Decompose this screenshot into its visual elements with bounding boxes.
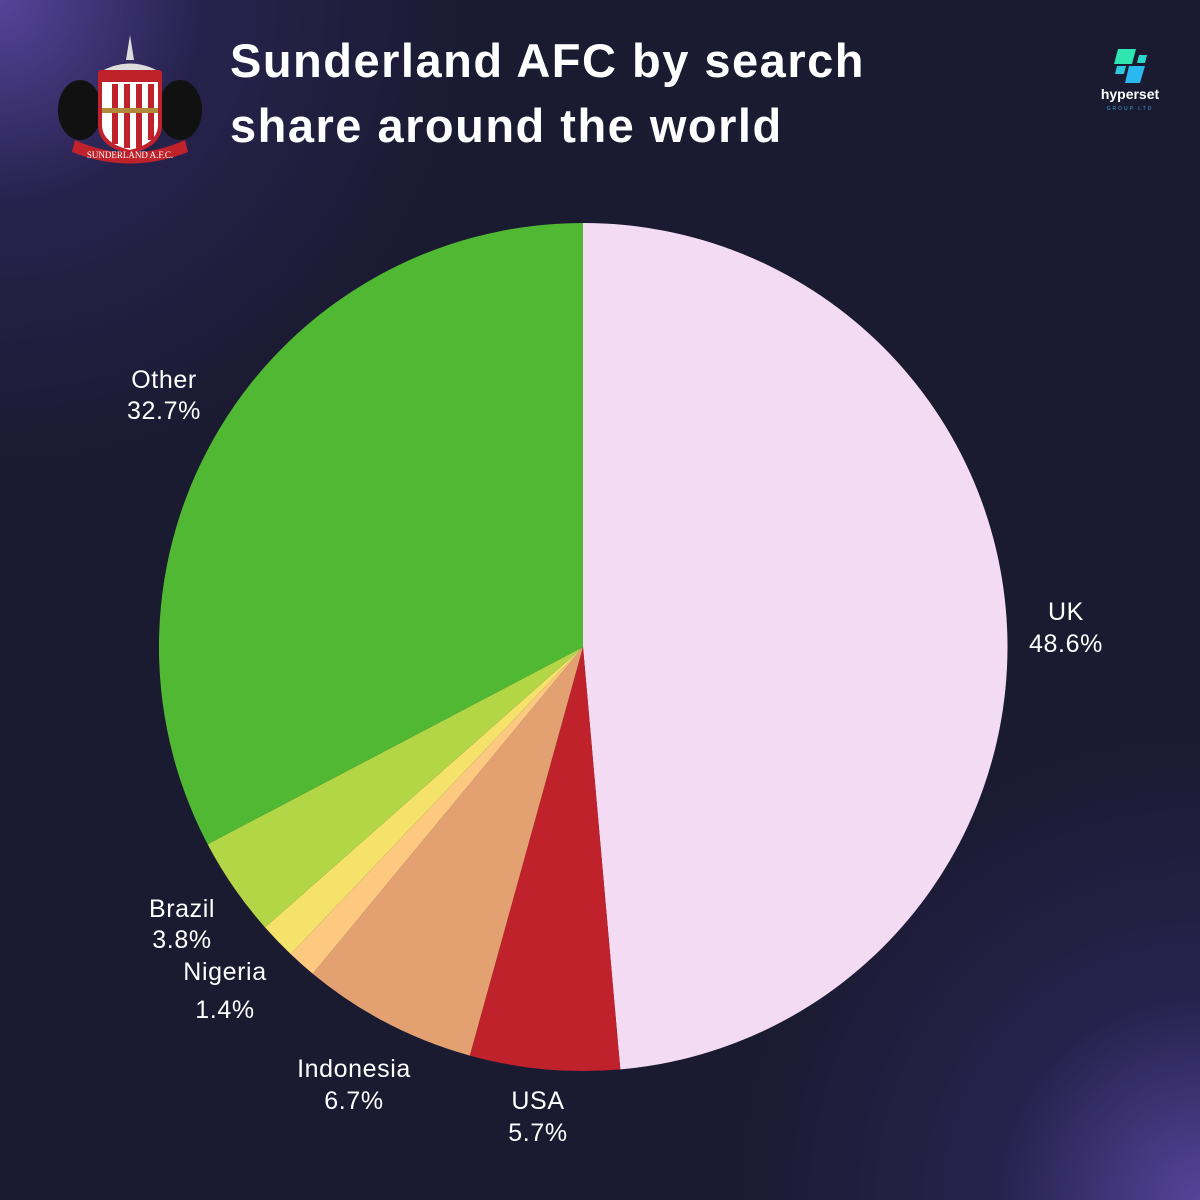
pie labels: 3.8% <box>152 926 212 954</box>
title: share around the world <box>230 99 783 152</box>
icon: Sunderland crest: SUNDERLAND A.F.C. <box>87 150 173 160</box>
title <box>230 34 865 152</box>
pie labels: Brazil <box>149 895 215 923</box>
pie labels: 5.7% <box>508 1119 568 1147</box>
pie labels: USA <box>511 1087 565 1115</box>
icon: hyperset logo <box>1101 49 1160 112</box>
pie labels <box>127 366 1103 1147</box>
pie chart <box>159 223 1008 1071</box>
pie labels: Nigeria <box>183 958 267 986</box>
title: Sunderland AFC by search <box>230 34 865 87</box>
pie labels: 1.4% <box>195 996 255 1024</box>
icon: hyperset logo: hyperset <box>1101 86 1160 102</box>
pie labels: Indonesia <box>297 1055 411 1083</box>
pie labels: 6.7% <box>324 1087 384 1115</box>
icon: hyperset logo: GROUP LTD <box>1107 106 1153 112</box>
pie labels: 48.6% <box>1029 630 1103 658</box>
icon: Sunderland crest <box>58 35 202 164</box>
pie labels: UK <box>1048 598 1084 626</box>
pie labels: 32.7% <box>127 397 201 425</box>
pie labels: Other <box>131 366 197 394</box>
